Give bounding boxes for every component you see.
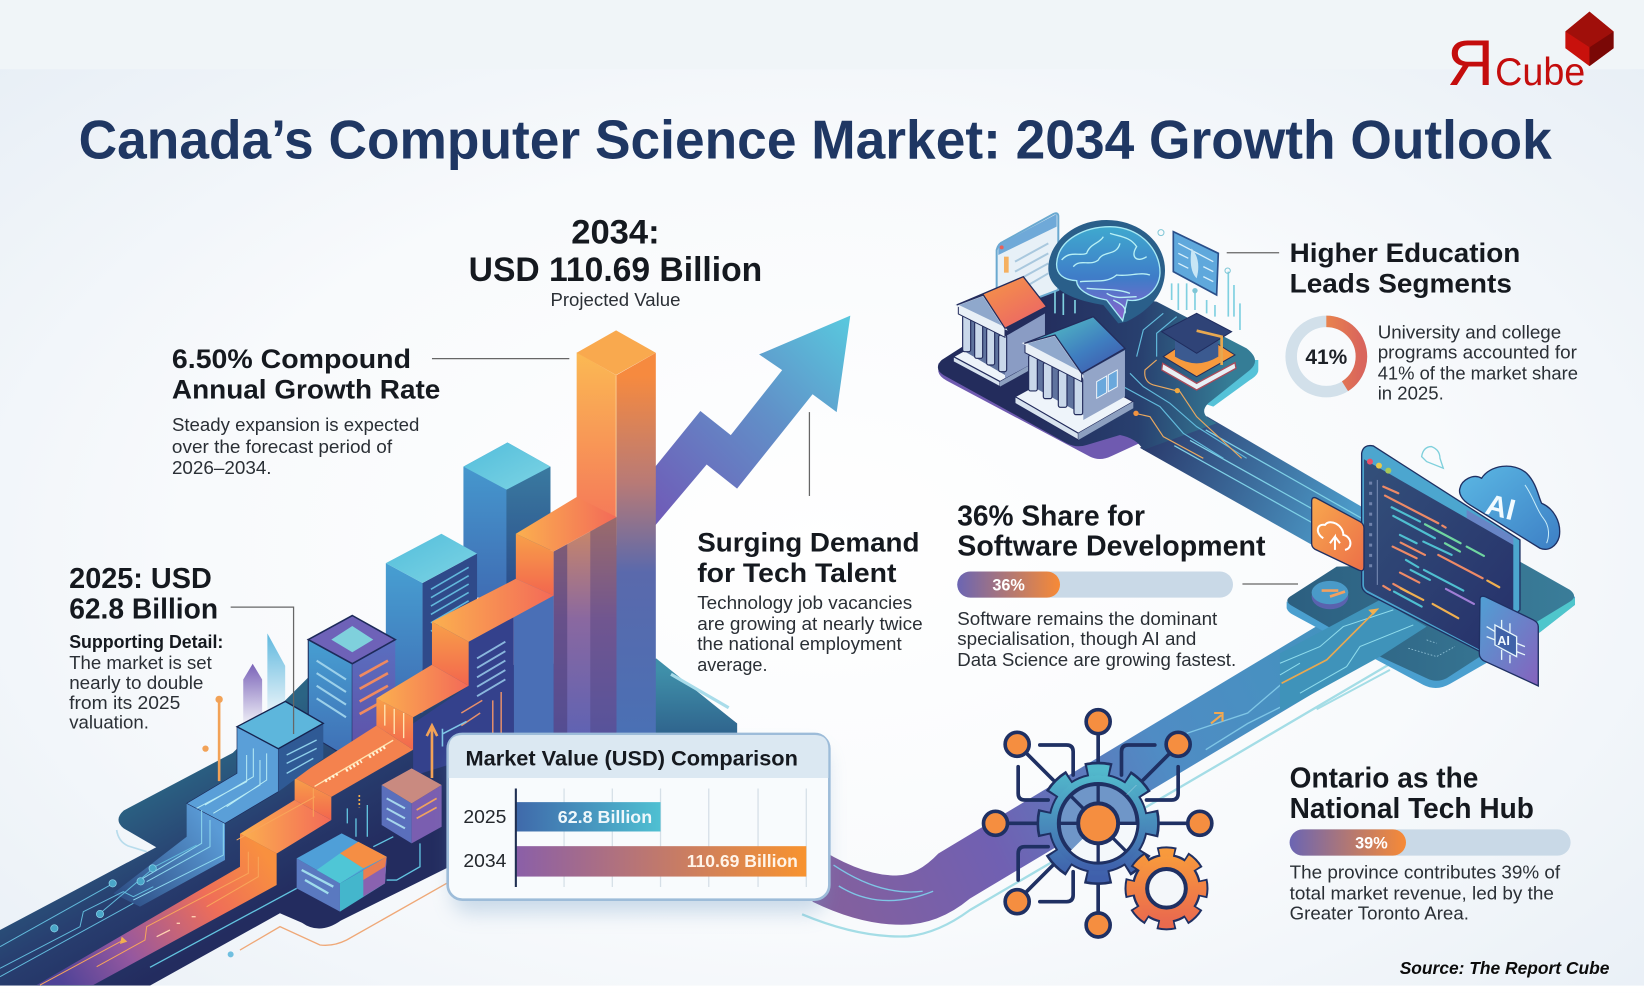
platform right wedge <box>587 658 737 739</box>
progress bar 39% <box>1290 829 1571 856</box>
base platform <box>0 661 737 986</box>
chart title: Market Value (USD) Comparison <box>466 747 798 770</box>
bar 2034: 110.69 Billion <box>687 851 798 871</box>
callout: software development: specialisation, though AI and <box>957 628 1196 649</box>
cloud AI badge <box>1460 466 1560 549</box>
building 1 <box>953 277 1047 387</box>
hub platform rim <box>1287 597 1575 688</box>
code lines <box>1383 487 1499 618</box>
callout: Ontario: total market revenue, led by the <box>1290 883 1554 904</box>
bar 2025: 2025 <box>463 806 506 827</box>
callout: 2025 value: The market is set <box>69 652 213 673</box>
callout: 2034 projected value: Projected Value <box>550 289 680 310</box>
code screen <box>1362 446 1520 652</box>
long orange band <box>37 833 277 985</box>
callout: tech talent: are growing at nearly twice <box>697 613 923 634</box>
callout: higher education: Leads Segments <box>1290 268 1512 299</box>
callout: Ontario: The province contributes 39% of <box>1290 862 1561 883</box>
medium blue column <box>386 534 477 713</box>
callout: growth rate: 6.50% Compound <box>172 343 411 374</box>
callout: 2025 value: nearly to double <box>69 672 203 693</box>
card body <box>448 734 829 900</box>
donut chart 41%: 41% <box>1305 346 1348 369</box>
road tail over platform <box>1280 600 1427 712</box>
callout: higher education <box>1227 237 1578 404</box>
document panel <box>997 213 1058 313</box>
bar 2034 <box>463 846 806 877</box>
bottom white strip <box>0 986 1644 993</box>
callout: growth rate: over the forecast period of <box>172 436 393 457</box>
callout: higher education: University and college <box>1378 322 1561 343</box>
bar 2025 <box>463 802 661 831</box>
callout: 2034 projected value <box>469 213 762 310</box>
hub disc <box>1312 581 1348 609</box>
callout: Ontario: Greater Toronto Area. <box>1290 903 1469 924</box>
callout: Ontario <box>1290 761 1571 924</box>
brain <box>1048 220 1165 323</box>
orange staircase <box>240 497 616 854</box>
callout: software development: 36% Share for <box>957 499 1145 531</box>
callout: growth rate: 2026–2034. <box>172 457 272 478</box>
callout: software development <box>957 499 1298 670</box>
card shadow <box>453 750 825 912</box>
callout: higher education: in 2025. <box>1378 383 1444 404</box>
donut chart 41% <box>1291 321 1361 392</box>
circuit traces <box>1123 313 1247 458</box>
callout: higher education: 41% of the market share <box>1378 363 1578 384</box>
callout: Ontario: Ontario as the <box>1290 761 1478 793</box>
callout: 2025 value <box>69 562 294 734</box>
stepped front of tall column <box>554 517 616 744</box>
platform top <box>938 288 1255 450</box>
higher education illustration <box>938 213 1258 459</box>
blue ribbon fade <box>113 803 225 907</box>
tall orange column <box>554 330 656 744</box>
cyan dot <box>228 951 234 957</box>
callout: 2025 value: 62.8 Billion <box>69 593 218 625</box>
title: Canada’s Computer Science Market: 2034 Growth Outlook <box>79 109 1552 170</box>
progress bar 39%: 39% <box>1355 834 1388 852</box>
gear network icon <box>983 710 1212 937</box>
orange lower trace <box>240 883 447 950</box>
purple server column <box>308 616 395 760</box>
colourful cube <box>297 833 387 912</box>
logo: RCube: Cube <box>1495 51 1585 94</box>
bottom-left ribbons and cubes <box>0 701 447 985</box>
callout: growth rate: Annual Growth Rate <box>172 373 440 404</box>
callout: tech talent: the national employment <box>697 633 902 654</box>
building 2 <box>1015 317 1133 440</box>
callout: tech talent: for Tech Talent <box>697 557 896 588</box>
small orange gear <box>1130 852 1202 924</box>
small blue arrow <box>267 633 285 713</box>
callout: 2025 value: from its 2025 <box>69 692 180 713</box>
tablet panel <box>1173 232 1218 295</box>
AI chip tile <box>1479 596 1538 686</box>
orange marker line <box>218 700 220 781</box>
callout: tech talent: Surging Demand <box>697 527 920 558</box>
callout: tech talent: Technology job vacancies <box>697 592 912 613</box>
dark circuit panel <box>413 613 514 776</box>
small server cube <box>382 768 442 843</box>
callout: 2034 projected value: 2034: <box>571 213 660 251</box>
tall blue column <box>463 443 550 598</box>
platform cyan rim <box>1203 360 1258 407</box>
callout: software development: Software Development <box>957 530 1266 562</box>
cloud AI badge: AI <box>1482 488 1519 527</box>
network nodes <box>983 710 1212 937</box>
small orange arrow <box>427 726 437 778</box>
callout: tech talent: average. <box>697 654 767 675</box>
bar 2025: 62.8 Billion <box>558 807 652 827</box>
connector lines <box>1008 735 1186 912</box>
callout: 2034 projected value: USD 110.69 Billion <box>469 251 762 289</box>
AI chip tile: AI <box>1497 634 1510 648</box>
connecting road to the hub <box>802 588 1426 937</box>
isometric growth illustration <box>0 316 850 986</box>
callout: 2025 value: Supporting Detail: <box>69 631 223 652</box>
progress bar 36%: 36% <box>992 576 1025 594</box>
decorative rising arrow <box>655 316 850 525</box>
callout: growth rate <box>172 343 569 478</box>
blue stepped cube <box>133 701 323 900</box>
stair steps <box>516 497 616 552</box>
data ticks <box>1055 272 1240 330</box>
bar 2034: 2034 <box>463 850 506 871</box>
callout: higher education: Higher Education <box>1290 237 1520 268</box>
graduation cap and books <box>1162 313 1236 390</box>
platform purple rim <box>938 363 1147 459</box>
callout: software development: Software remains the dominant <box>957 608 1218 629</box>
callout: 2025 value: valuation. <box>69 712 149 733</box>
blue wall beneath stairs <box>514 592 554 744</box>
hub platform top <box>1287 562 1574 681</box>
callout: software development: Data Science are growing fastest. <box>957 649 1236 670</box>
orange cloud tile <box>1312 498 1364 571</box>
callout: 2025 value: 2025: USD <box>69 562 212 594</box>
logo: RCube <box>1447 12 1614 99</box>
main gear <box>1045 770 1151 877</box>
callout: growth rate: Steady expansion is expected <box>172 414 419 435</box>
callout: tech talent <box>697 412 923 675</box>
small outline cloud <box>1422 447 1443 468</box>
circuit traces <box>0 845 197 977</box>
market value chart card <box>448 734 829 912</box>
logo: RCube: Я <box>1447 26 1494 99</box>
source note: Source: The Report Cube <box>1400 958 1609 978</box>
small purple arrow <box>243 664 262 729</box>
upper road between education and AI hub <box>1140 416 1363 571</box>
progress bar 36% <box>957 571 1233 598</box>
callout: higher education: programs accounted for <box>1378 342 1577 363</box>
AI hub illustration <box>1280 446 1575 712</box>
card header <box>449 735 828 778</box>
callout: Ontario: National Tech Hub <box>1290 792 1534 824</box>
